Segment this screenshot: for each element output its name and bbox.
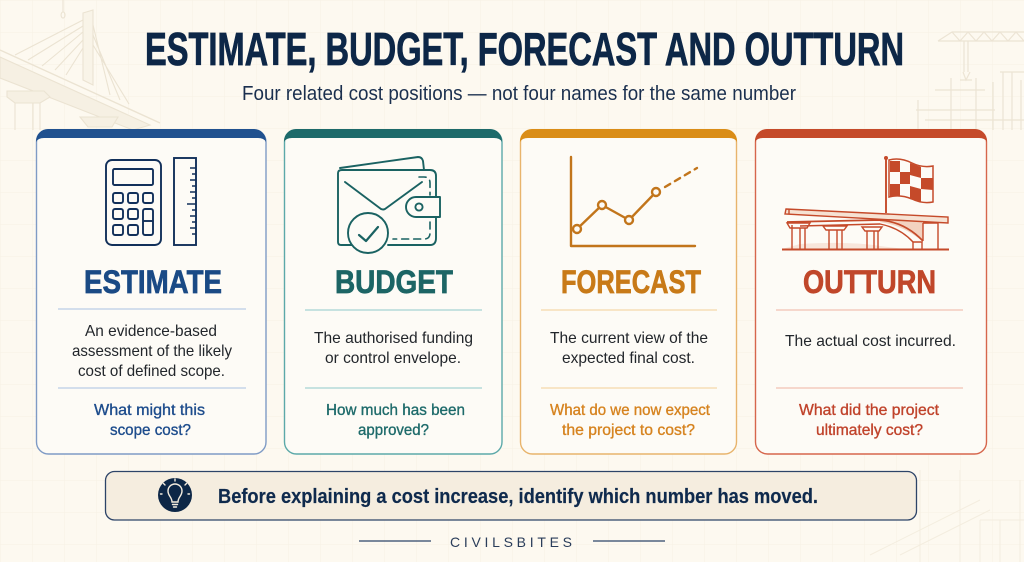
question: outturn: ultimately cost? <box>816 422 923 439</box>
question: estimate: scope cost? <box>110 422 191 439</box>
background: lower right sketch <box>870 470 1024 562</box>
background: crane and scaffold sketch <box>916 32 1024 130</box>
question: forecast: What do we now expect <box>550 402 711 419</box>
heading: outturn: OUTTURN <box>803 264 936 300</box>
definition: forecast: expected final cost. <box>562 350 695 367</box>
question: forecast <box>550 402 711 439</box>
icon: calculator and ruler <box>106 158 196 245</box>
callout text: Before explaining a cost increase, identify which number has moved. <box>218 486 818 508</box>
question: outturn: What did the project <box>799 402 940 419</box>
question: estimate <box>94 402 205 439</box>
question: outturn <box>799 402 940 439</box>
definition: estimate: An evidence-based <box>85 323 217 340</box>
definition: estimate <box>72 323 232 380</box>
icon: lightbulb <box>158 478 192 512</box>
heading: forecast: FORECAST <box>561 264 701 300</box>
footer brand: CIVILSBITES <box>450 534 572 550</box>
panel: estimate <box>36 129 266 454</box>
question: budget: How much has been <box>326 402 465 419</box>
question: budget <box>326 402 465 439</box>
heading: budget: BUDGET <box>335 264 453 300</box>
icon: wallet with check <box>338 157 440 253</box>
definition: budget: The authorised funding <box>314 330 473 347</box>
question: estimate: What might this <box>94 402 205 419</box>
subtitle: Four related cost positions — not four names for the same number <box>242 83 796 105</box>
question: forecast: the project to cost? <box>562 422 695 439</box>
panel: budget <box>284 129 502 454</box>
icon: line chart with dashed projection <box>571 157 697 246</box>
definition: estimate: cost of defined scope. <box>78 363 225 380</box>
background: cable-stayed bridge sketch <box>0 0 160 130</box>
question: budget: approved? <box>358 422 429 439</box>
definition: budget: or control envelope. <box>325 350 461 367</box>
definition: budget <box>314 330 473 367</box>
definition: outturn: The actual cost incurred. <box>785 333 956 350</box>
icon: completed bridge with chequered flag <box>782 156 949 250</box>
icon part: chequered flag <box>889 159 933 203</box>
heading: estimate: ESTIMATE <box>84 264 222 300</box>
panel: outturn <box>755 129 987 454</box>
definition: forecast: The current view of the <box>550 330 708 347</box>
definition: estimate: assessment of the likely <box>72 343 232 360</box>
callout banner <box>106 472 916 520</box>
definition: forecast <box>550 330 708 367</box>
panel: forecast <box>520 129 737 454</box>
